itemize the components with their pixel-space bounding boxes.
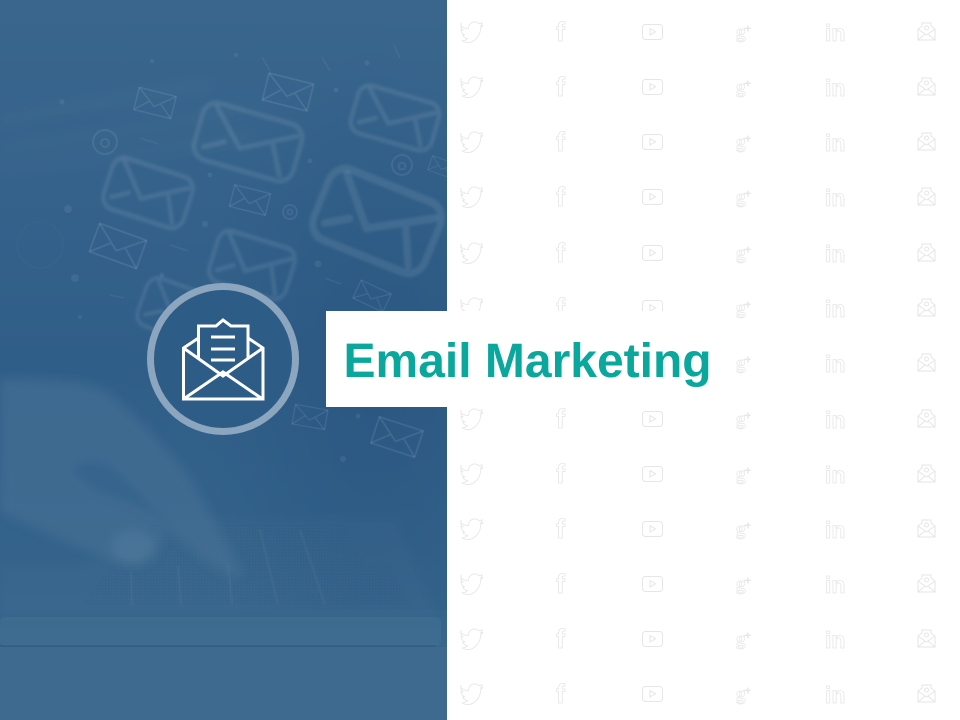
- streaks: [0, 85, 250, 170]
- panel: social icon pattern: [461, 17, 935, 709]
- thin envelopes: [89, 73, 456, 457]
- thick envelopes: [100, 83, 447, 349]
- keyboard gaps: [131, 530, 325, 605]
- icon: open envelope badge: [150, 286, 296, 432]
- title: Email Marketing: [344, 335, 712, 388]
- badge ring: [150, 286, 296, 432]
- title box: [326, 311, 725, 407]
- panel: photo background: [0, 0, 456, 720]
- specks: [60, 45, 400, 462]
- at signs: [17, 130, 412, 268]
- icon: open envelope with letter: [184, 320, 263, 399]
- hand: [0, 378, 243, 576]
- laptop base: [0, 520, 436, 615]
